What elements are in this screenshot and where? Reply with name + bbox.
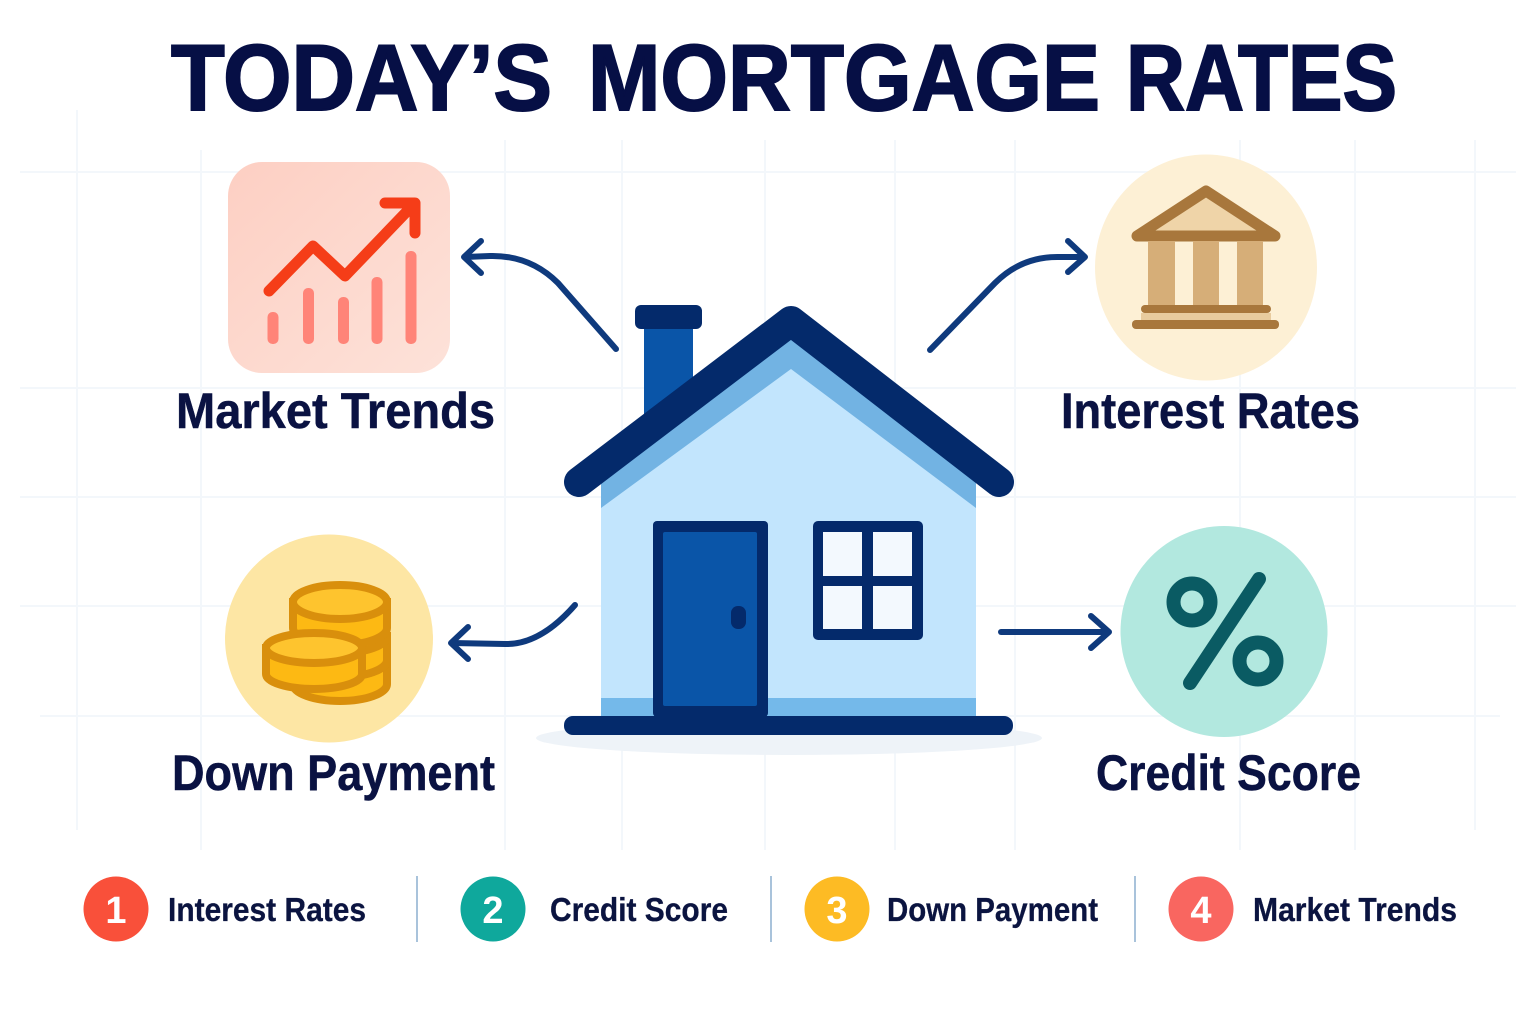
- label: market trends: Market Trends: [176, 383, 495, 439]
- legend item 2: Credit Score: [550, 891, 728, 928]
- legend item 1: 1: [105, 890, 127, 932]
- arrow: to interest rates: [930, 241, 1085, 350]
- icon: market trends chart: [228, 162, 450, 373]
- arrow: to down payment: [451, 605, 575, 659]
- label: credit score: Credit Score: [1096, 745, 1361, 801]
- legend item 1: [84, 876, 366, 942]
- icon: house: [536, 305, 1042, 755]
- label: down payment: Down Payment: [172, 745, 495, 801]
- legend item 4: Market Trends: [1253, 891, 1457, 928]
- panel: down payment: [172, 534, 495, 801]
- legend item 3: 3: [826, 890, 848, 932]
- label: interest rates: Interest Rates: [1061, 383, 1360, 439]
- legend item 1: Interest Rates: [168, 891, 366, 928]
- icon: percent: [1120, 526, 1328, 737]
- icon: bank: [1095, 154, 1317, 380]
- arrow: to market trends: [464, 241, 616, 349]
- legend item 4: 4: [1190, 890, 1212, 932]
- legend item 3: [804, 876, 1098, 942]
- title: RATES: [1126, 25, 1397, 130]
- title: TODAY’S: [171, 25, 552, 130]
- legend item 4: [1168, 876, 1457, 942]
- title: [171, 25, 1397, 130]
- panel: interest rates: [1061, 154, 1360, 439]
- legend item 2: [460, 876, 728, 942]
- legend: [84, 876, 1457, 942]
- legend item 2: 2: [482, 890, 504, 932]
- panel: credit score: [1096, 526, 1361, 801]
- title: MORTGAGE: [588, 25, 1100, 130]
- icon: coins: [225, 534, 433, 742]
- arrow: to credit score: [1001, 616, 1109, 648]
- panel: market trends: [176, 162, 495, 439]
- legend item 3: Down Payment: [887, 891, 1098, 928]
